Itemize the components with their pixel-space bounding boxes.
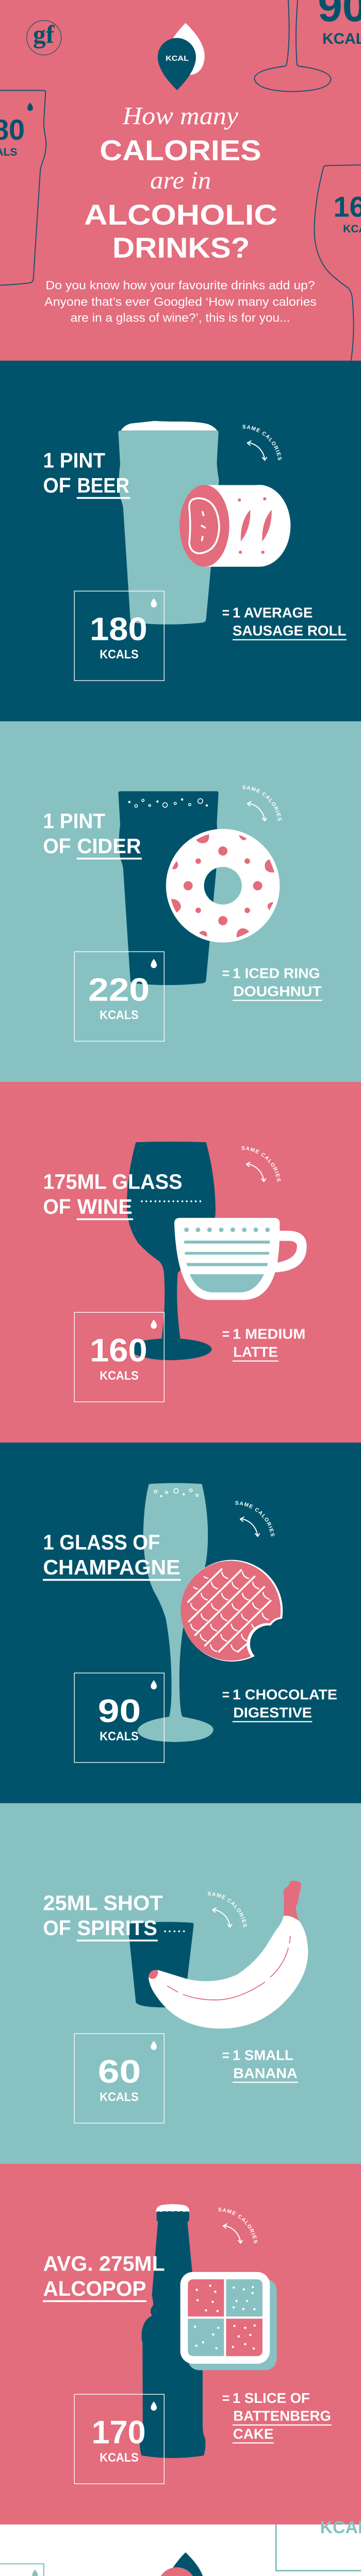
kcal box: 180 [90, 611, 147, 647]
heading: 25ml shot of spirits: OF [43, 1916, 71, 1940]
kcal box [74, 2033, 164, 2123]
heading: 1 pint of cider: OF [43, 834, 71, 858]
same calories arrow: SAME CALORIES [207, 1892, 247, 1927]
food label: 1 AVERAGE [233, 605, 313, 621]
food label [222, 605, 347, 640]
icon: kcal drops: KCAL [166, 55, 189, 63]
icon: battenberg slice [180, 2272, 277, 2370]
heading: avg 275ml alcopop: ALCOPOP [43, 2277, 146, 2300]
food label: = [222, 1326, 229, 1342]
food label: LATTE [233, 1344, 278, 1360]
intro text: are in a glass of wine?’, this is for you... [71, 311, 290, 325]
logo: gf roundel: gf [33, 20, 55, 48]
icon: kcal drops [158, 23, 205, 90]
food label: DIGESTIVE [233, 1704, 312, 1720]
outline: wine glass [314, 165, 361, 361]
food label [222, 965, 322, 1001]
icon: banana [149, 1881, 308, 2029]
food label: 1 ICED RING [233, 965, 320, 981]
food label: = [222, 1687, 229, 1703]
heading: 25ml shot of spirits: 25ML SHOT [43, 1891, 163, 1915]
intro text: Anyone that’s ever Googled ‘How many calories [44, 295, 317, 308]
icon: chocolate digestive [180, 1560, 283, 1662]
food label: SAUSAGE ROLL [233, 622, 347, 638]
title: ALCOHOLIC [84, 198, 277, 231]
kcal box: KCALS [100, 1369, 139, 1383]
food label: = [222, 2047, 229, 2063]
panel: beer [0, 361, 361, 721]
icon: wine glass [127, 1142, 216, 1360]
kcal box: KCALS [100, 648, 139, 662]
kcal box: 60 [98, 2054, 141, 2090]
heading: 1 glass of champagne [43, 1531, 181, 1581]
icon: champagne flute [138, 1483, 214, 1742]
kcal box [74, 1312, 164, 1402]
outline: pint glass [0, 90, 46, 285]
heading: 1 glass of champagne: 1 GLASS OF [43, 1531, 160, 1554]
title: How many [122, 103, 239, 130]
food label: = [222, 605, 229, 621]
heading: 175ml glass of wine: 175ML GLASS [43, 1170, 183, 1194]
kcal box: KCALS [100, 1009, 139, 1022]
panel: cider [0, 721, 361, 1082]
title [84, 103, 277, 264]
kcal box: 160 [90, 1332, 147, 1368]
food label: 1 CHOCOLATE [233, 1687, 337, 1703]
food label: = [222, 965, 229, 981]
icon: pint of beer [118, 421, 219, 624]
heading: 1 pint of beer: OF [43, 473, 71, 497]
kcal box [74, 1673, 164, 1762]
logo: gf roundel [27, 20, 61, 55]
heading: 1 pint of beer [43, 449, 130, 499]
title: are in [150, 167, 211, 194]
kcal box: 90 [98, 1693, 141, 1729]
heading: 1 glass of champagne: CHAMPAGNE [43, 1555, 180, 1579]
food label [222, 1326, 305, 1362]
panel: header [0, 0, 361, 361]
kcal box [74, 2394, 164, 2484]
same calories arrow: SAME CALORIES [242, 425, 282, 461]
icon: latte cup [174, 1218, 307, 1300]
food label: DOUGHNUT [233, 983, 322, 999]
food label [222, 1687, 337, 1722]
outline: champagne glass foot [254, 0, 361, 92]
food label: BANANA [233, 2065, 298, 2081]
same calories arrow: SAME CALORIES [235, 1501, 274, 1536]
heading: 175ml glass of wine [43, 1170, 183, 1220]
food label [222, 2390, 332, 2444]
heading: 1 pint of beer: BEER [77, 473, 129, 497]
heading: 25ml shot of spirits [43, 1891, 163, 1941]
same calories arrow: SAME CALORIES [241, 1146, 281, 1182]
food label: BATTENBERG [233, 2408, 331, 2424]
icon: shot glass [128, 1922, 194, 2007]
heading: 1 pint of beer: 1 PINT [43, 449, 105, 472]
intro text [44, 279, 317, 325]
kcal box: KCALS [100, 1730, 139, 1743]
same calories arrow: SAME CALORIES [218, 2208, 258, 2243]
kcal box: KCALS [100, 2091, 139, 2104]
same calories arrow: SAME CALORIES [242, 785, 282, 821]
icon: iced ring doughnut [166, 829, 280, 943]
kcal box [74, 591, 164, 681]
decorative kcal box left [0, 2564, 44, 2576]
heading: 175ml glass of wine: OF [43, 1195, 71, 1218]
icon: pint of cider [118, 791, 219, 985]
panel: champagne [0, 1443, 361, 1803]
icon: alcopop bottle [140, 2204, 205, 2458]
heading: avg 275ml alcopop [43, 2252, 165, 2302]
panel: footer [0, 2518, 361, 2576]
heading: 1 pint of cider: CIDER [77, 834, 141, 858]
food label: 1 SMALL [233, 2047, 293, 2063]
heading: 25ml shot of spirits: SPIRITS [77, 1916, 157, 1940]
decorative kcal box top right [276, 2518, 361, 2571]
icon: kcal drops [158, 2552, 205, 2576]
kcal box: 170 [92, 2414, 146, 2450]
panel: spirits [0, 1803, 361, 2164]
heading: 1 pint of cider [43, 809, 142, 859]
food label [222, 2047, 298, 2083]
dotted measure line [164, 1930, 185, 1932]
kcal box [74, 952, 164, 1041]
kcal box: KCALS [100, 2451, 139, 2465]
panel: wine [0, 1082, 361, 1443]
food label: = [222, 2390, 229, 2406]
icon: sausage roll [179, 485, 290, 567]
title: DRINKS? [112, 231, 250, 264]
panel: alcopop [0, 2164, 361, 2524]
food label: 1 MEDIUM [233, 1326, 305, 1342]
intro text: Do you know how your favourite drinks add up? [45, 279, 315, 292]
title: CALORIES [100, 134, 261, 166]
dotted measure line [141, 1200, 201, 1202]
heading: 1 pint of cider: 1 PINT [43, 809, 105, 833]
heading: avg 275ml alcopop: AVG. 275ML [43, 2252, 165, 2276]
food label: CAKE [233, 2426, 273, 2442]
food label: 1 SLICE OF [233, 2390, 310, 2406]
heading: 175ml glass of wine: WINE [77, 1195, 133, 1218]
kcal box: 220 [88, 972, 150, 1008]
